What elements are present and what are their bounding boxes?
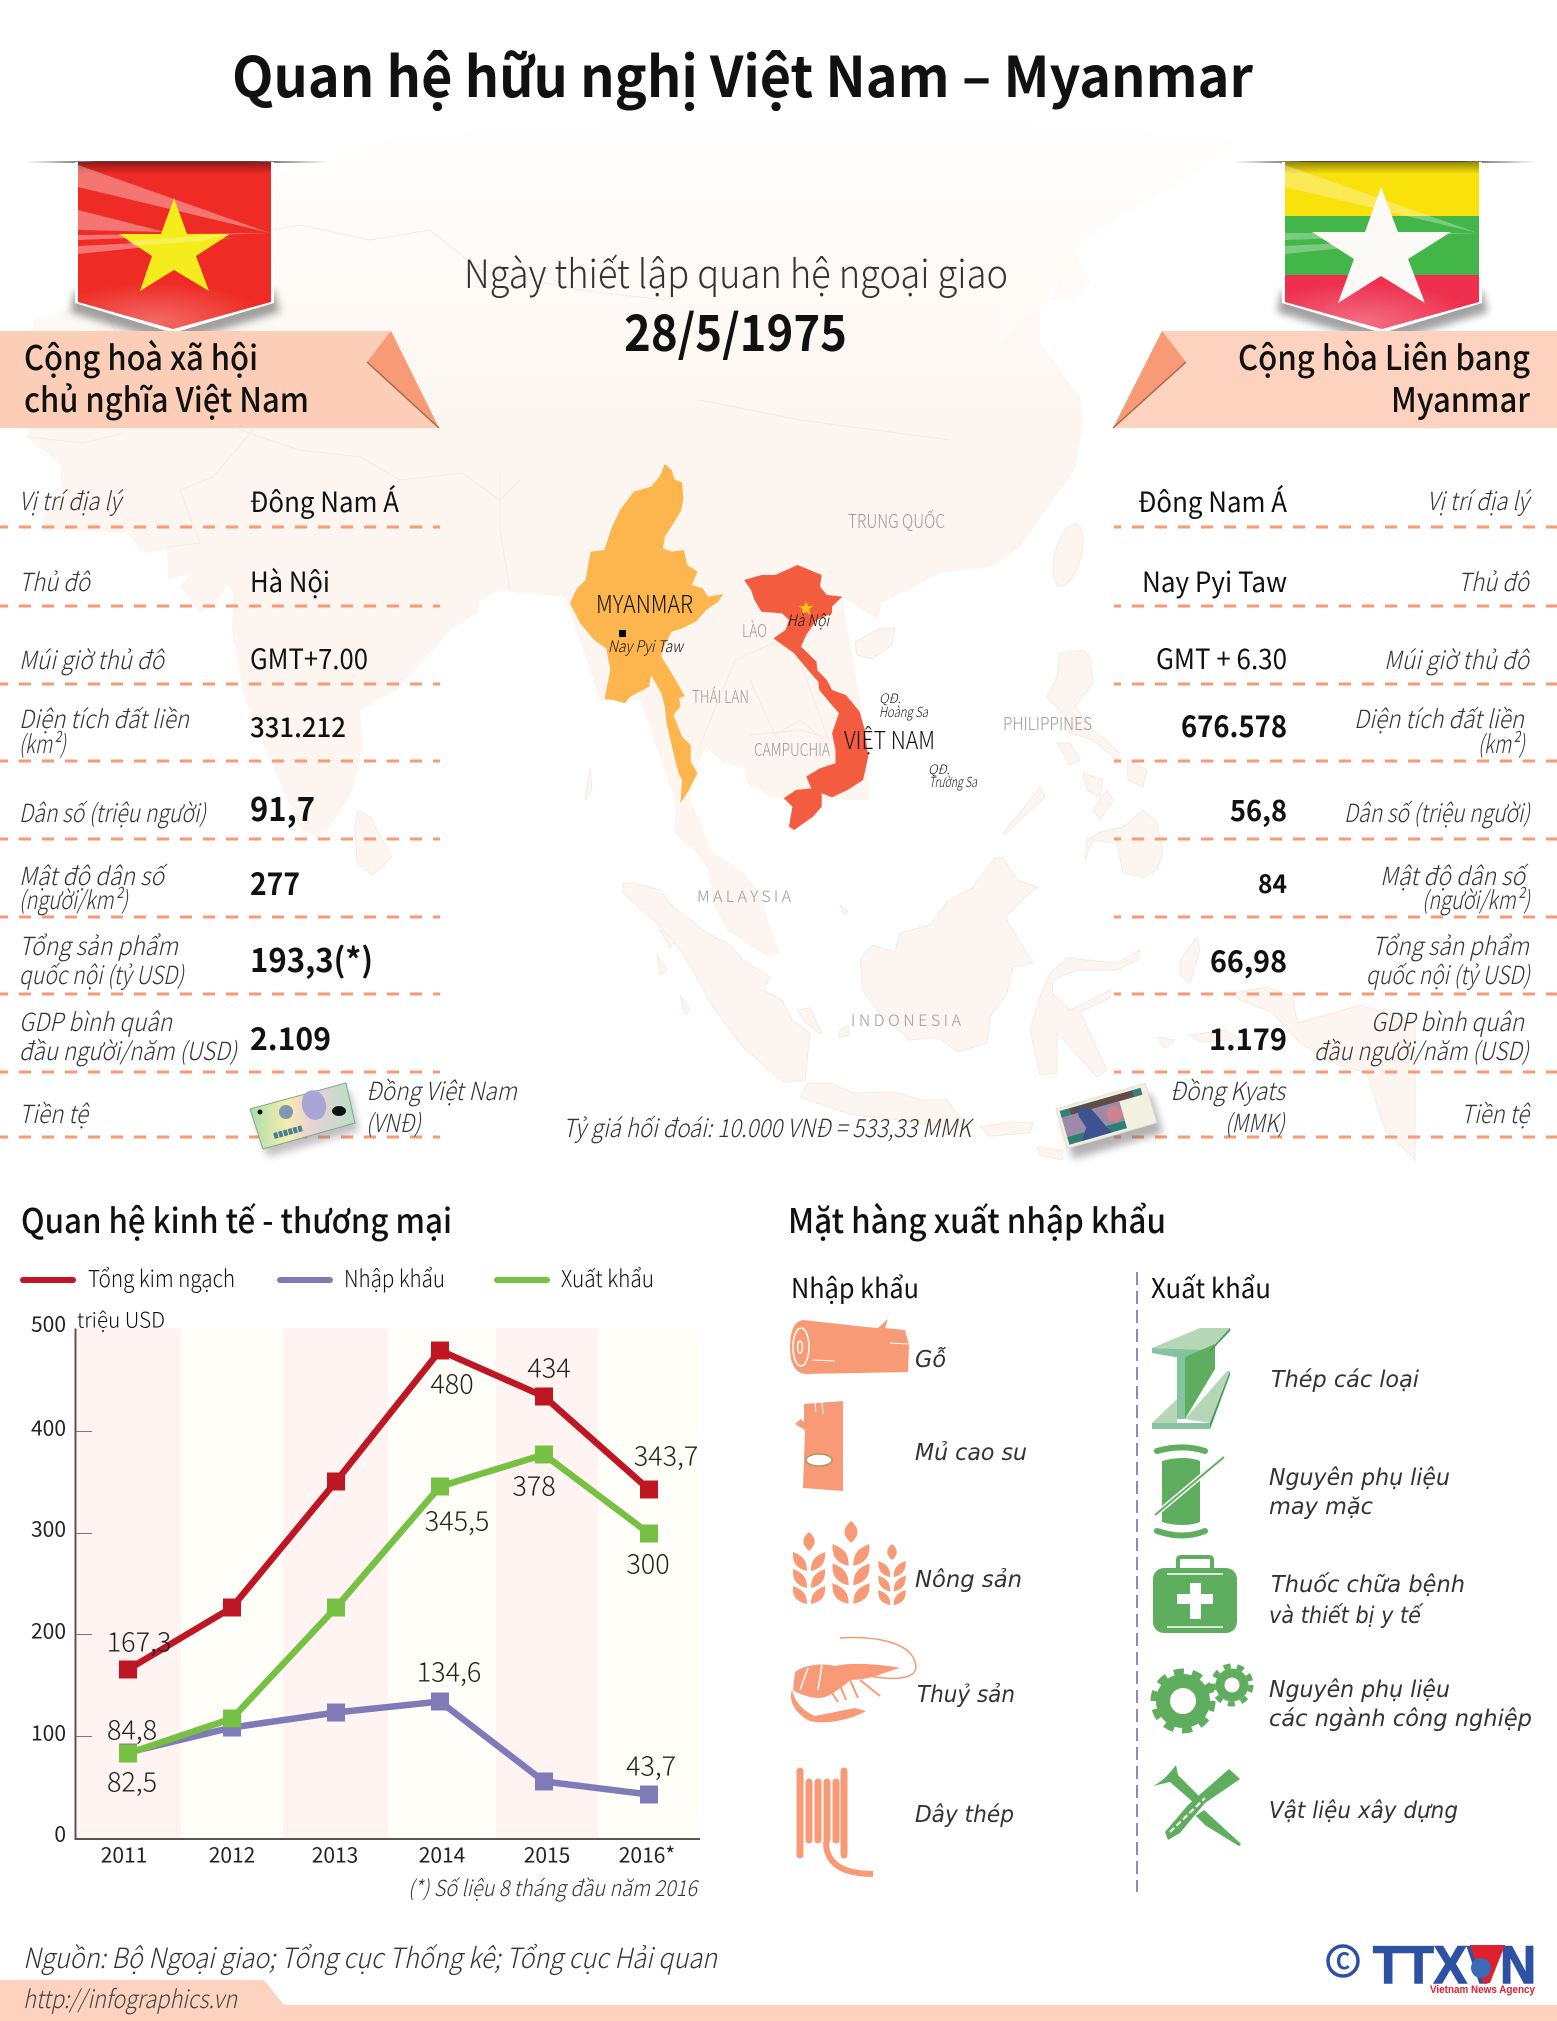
map: Vietnam: QĐ. <box>928 759 950 778</box>
export: construction materials: Vật liệu xây dựng <box>1269 1798 1458 1824</box>
import: wood: Gỗ <box>915 1346 946 1373</box>
table: Myanmar values: 1.179 <box>1209 1015 1287 1059</box>
TTXVN logo: C <box>1336 1944 1350 1976</box>
export: garment materials: Nguyên phụ liệu <box>1269 1465 1450 1491</box>
table: Vietnam labels: Vị trí địa lý <box>19 482 124 518</box>
banner: Vietnam: chủ nghĩa Việt Nam <box>24 373 309 422</box>
table: Vietnam values: 331.212 <box>250 706 346 745</box>
table: Myanmar labels: đầu người/năm (USD) <box>1314 1032 1530 1068</box>
banknote: Myanmar kyat <box>1056 1083 1163 1159</box>
line chart: trade 2011-2016: triệu USD <box>77 1304 165 1334</box>
banner: Myanmar: Myanmar <box>1391 373 1530 422</box>
exchange rate note: Tỷ giá hối đoái: 10.000 VNĐ = 533,33 MMK <box>563 1109 975 1145</box>
table: Vietnam values: GMT+7.00 <box>250 638 368 678</box>
table: Vietnam labels: Múi giờ thủ đô <box>19 641 166 677</box>
line chart: trade 2011-2016: 2015 <box>524 1840 570 1870</box>
table: Myanmar values: GMT + 6.30 <box>1156 638 1287 678</box>
heading: exports: Xuất khẩu <box>1151 1267 1271 1306</box>
map labels: neighbouring countries: CAMPUCHIA <box>754 736 830 762</box>
import: wood <box>790 1319 946 1374</box>
banner: Vietnam <box>0 331 439 428</box>
import: steel wire <box>800 1771 1014 1874</box>
chart legend: Tổng kim ngạch <box>88 1260 235 1294</box>
title: Quan hệ hữu nghị Việt Nam – Myanmar <box>232 33 1254 114</box>
table: Myanmar labels: Vị trí địa lý <box>1427 482 1532 518</box>
line chart: trade 2011-2016: 2016* <box>619 1840 675 1870</box>
data labels: 84,8 <box>107 1708 157 1748</box>
table: Myanmar labels: quốc nội (tỷ USD) <box>1366 956 1531 992</box>
banner: Myanmar <box>1113 331 1557 428</box>
line chart: trade 2011-2016: 2013 <box>312 1840 358 1870</box>
table: Vietnam labels: Thủ đô <box>19 563 92 599</box>
map labels: neighbouring countries: THÁI LAN <box>692 683 749 709</box>
heading: economy and trade: Quan hệ kinh tế - thương mại <box>21 1194 452 1243</box>
map: Vietnam: QĐ. <box>879 688 901 707</box>
line chart: trade 2011-2016: 400 <box>31 1412 66 1442</box>
map: Myanmar <box>570 464 723 803</box>
export: industrial materials: các ngành công nghiệp <box>1269 1706 1532 1732</box>
footer strip <box>0 1980 1557 2021</box>
export: garment materials <box>1155 1447 1450 1536</box>
table: Myanmar labels: Tiền tệ <box>1461 1095 1531 1131</box>
currency: Vietnam: Đồng Việt Nam <box>366 1072 518 1108</box>
source: Nguồn: Bộ Ngoại giao; Tổng cục Thống kê; Tổng cục Hải quan <box>23 1937 718 1977</box>
export: garment materials: may mặc <box>1269 1494 1373 1520</box>
table: Vietnam labels: quốc nội (tỷ USD) <box>19 956 185 992</box>
chart legend: Xuất khẩu <box>561 1260 654 1294</box>
data labels: 82,5 <box>107 1760 157 1800</box>
TTXVN logo: TTXVN <box>1373 1936 1536 1995</box>
export: medicine <box>1153 1557 1465 1633</box>
table: Vietnam values <box>250 481 399 1059</box>
divider <box>1136 1272 1138 1892</box>
table: Vietnam labels <box>19 482 238 1131</box>
table: Myanmar values <box>1138 481 1287 1059</box>
table: Vietnam values: 193,3(*) <box>250 934 373 982</box>
data labels: 300 <box>626 1542 670 1582</box>
banner: Vietnam: Cộng hoà xã hội <box>24 331 258 380</box>
comparison table: dashed row lines <box>0 527 1557 1137</box>
table: Vietnam labels: Tiền tệ <box>19 1095 90 1131</box>
import: seafood: Thuỷ sản <box>917 1682 1015 1708</box>
table: Vietnam values: 2.109 <box>250 1014 331 1059</box>
data labels: 167,3 <box>107 1620 171 1660</box>
banknote: Vietnam dong <box>250 1083 359 1157</box>
diplomatic date: 28/5/1975 <box>624 294 847 366</box>
currency: Myanmar: (MMK) <box>1225 1104 1286 1140</box>
data labels: 434 <box>527 1346 571 1386</box>
table: Vietnam labels: (người/km²) <box>19 881 129 917</box>
line chart: trade 2011-2016: 2011 <box>101 1840 147 1870</box>
currency: Myanmar <box>1170 1072 1287 1140</box>
map: Vietnam <box>744 565 978 830</box>
footer strip: http://infographics.vn <box>23 1980 238 2016</box>
diplomatic date: Ngày thiết lập quan hệ ngoại giao <box>464 244 1008 300</box>
series: Nhập khẩu <box>119 1692 658 1804</box>
table: Vietnam values: 277 <box>250 859 300 904</box>
data labels: 43,7 <box>626 1744 676 1784</box>
data labels: 378 <box>512 1464 556 1504</box>
table: Myanmar values: 84 <box>1258 864 1287 901</box>
table: Myanmar values: 676.578 <box>1181 702 1287 746</box>
map labels: neighbouring countries: LÀO <box>742 617 767 643</box>
table: Vietnam values: Hà Nội <box>250 561 330 601</box>
currency: Myanmar: Đồng Kyats <box>1170 1072 1287 1108</box>
line chart: trade 2011-2016: 300 <box>31 1514 66 1544</box>
table: Myanmar labels: GDP bình quân <box>1371 1003 1525 1039</box>
import: steel wire: Dây thép <box>915 1802 1014 1828</box>
line chart: trade 2011-2016 <box>31 1304 700 1870</box>
table: Myanmar labels: Tổng sản phẩm <box>1372 927 1530 963</box>
line chart: trade 2011-2016: 500 <box>31 1308 66 1338</box>
data labels: 345,5 <box>425 1500 489 1538</box>
series: Xuất khẩu <box>119 1446 658 1762</box>
map labels: neighbouring countries: INDONESIA <box>851 1007 962 1031</box>
data labels <box>107 1346 698 1800</box>
table: Myanmar labels: (người/km²) <box>1422 881 1531 917</box>
data labels: 134,6 <box>417 1650 481 1690</box>
import: rubber <box>795 1401 1027 1491</box>
table: Vietnam labels: GDP bình quân <box>19 1003 173 1039</box>
heading: import export goods: Mặt hàng xuất nhập khẩu <box>788 1194 1166 1243</box>
export: steel: Thép các loại <box>1271 1367 1420 1393</box>
line chart: trade 2011-2016: 100 <box>31 1718 66 1748</box>
banner: Myanmar: Cộng hòa Liên bang <box>1238 331 1530 380</box>
map labels: neighbouring countries: MALAYSIA <box>697 883 792 907</box>
map: Vietnam: Hoàng Sa <box>879 702 929 722</box>
table: Myanmar values: 66,98 <box>1210 937 1287 981</box>
import: seafood <box>791 1638 1015 1722</box>
line chart: trade 2011-2016: 200 <box>31 1616 66 1646</box>
export: medicine: và thiết bị y tế <box>1269 1603 1424 1629</box>
table: Myanmar labels: (km²) <box>1478 725 1526 761</box>
table: Myanmar labels <box>1314 482 1532 1131</box>
chart footnote: (*) Số liệu 8 tháng đầu năm 2016 <box>408 1871 699 1903</box>
export: steel <box>1152 1328 1420 1429</box>
chart legend <box>23 1260 654 1294</box>
currency: Vietnam <box>366 1072 518 1140</box>
table: Myanmar labels: Thủ đô <box>1458 563 1531 599</box>
import: agricultural products <box>793 1521 1022 1605</box>
table: Myanmar values: Đông Nam Á <box>1138 481 1287 521</box>
table: Vietnam labels: Diện tích đất liền <box>19 700 190 736</box>
diplomatic date <box>464 244 1008 366</box>
chart legend: Nhập khẩu <box>344 1260 445 1294</box>
data labels: 480 <box>430 1362 474 1402</box>
Myanmar flag ribbon <box>1233 161 1536 344</box>
table: Myanmar values: 56,8 <box>1230 788 1287 830</box>
import: agricultural products: Nông sản <box>915 1567 1022 1593</box>
map: Vietnam: Trường Sa <box>929 772 978 792</box>
map: Myanmar: Nay Pyi Taw <box>608 633 685 657</box>
map: Vietnam: Hà Nội <box>787 607 831 631</box>
heading: imports: Nhập khẩu <box>791 1267 919 1306</box>
line chart: trade 2011-2016: 2014 <box>419 1840 465 1870</box>
map labels: neighbouring countries: PHILIPPINES <box>1003 710 1092 736</box>
export: medicine: Thuốc chữa bệnh <box>1271 1572 1465 1598</box>
table: Vietnam labels: Dân số (triệu người) <box>19 794 207 830</box>
export: industrial materials: Nguyên phụ liệu <box>1269 1677 1450 1703</box>
table: Vietnam values: Đông Nam Á <box>250 481 399 521</box>
line chart: trade 2011-2016: 0 <box>54 1818 66 1848</box>
line chart: trade 2011-2016: 2012 <box>209 1840 255 1870</box>
table: Myanmar labels: Múi giờ thủ đô <box>1384 641 1531 677</box>
table: Vietnam labels: (km²) <box>19 725 67 761</box>
map: Myanmar: MYANMAR <box>596 585 693 621</box>
TTXVN logo: Vietnam News Agency <box>1430 1984 1536 1996</box>
series: Tổng kim ngạch <box>119 1342 658 1678</box>
export: industrial materials <box>1154 1666 1532 1732</box>
table: Myanmar labels: Mật độ dân số <box>1380 857 1529 893</box>
Vietnam flag ribbon <box>25 161 328 344</box>
table: Vietnam labels: Mật độ dân số <box>19 857 168 893</box>
table: Vietnam labels: đầu người/năm (USD) <box>19 1032 238 1068</box>
export: construction materials <box>1153 1765 1458 1845</box>
table: Vietnam values: 91,7 <box>250 783 315 831</box>
map labels: neighbouring countries: TRUNG QUỐC <box>848 507 945 534</box>
map: Vietnam: VIỆT NAM <box>844 721 935 757</box>
background map of Asia <box>25 110 1415 1160</box>
import: rubber: Mủ cao su <box>915 1440 1027 1466</box>
table: Vietnam labels: Tổng sản phẩm <box>19 927 179 963</box>
currency: Vietnam: (VNĐ) <box>366 1104 422 1140</box>
table: Myanmar values: Nay Pyi Taw <box>1142 561 1287 601</box>
data labels: 343,7 <box>634 1434 698 1474</box>
map labels: neighbouring countries <box>692 507 1092 1031</box>
table: Myanmar labels: Diện tích đất liền <box>1354 700 1525 736</box>
